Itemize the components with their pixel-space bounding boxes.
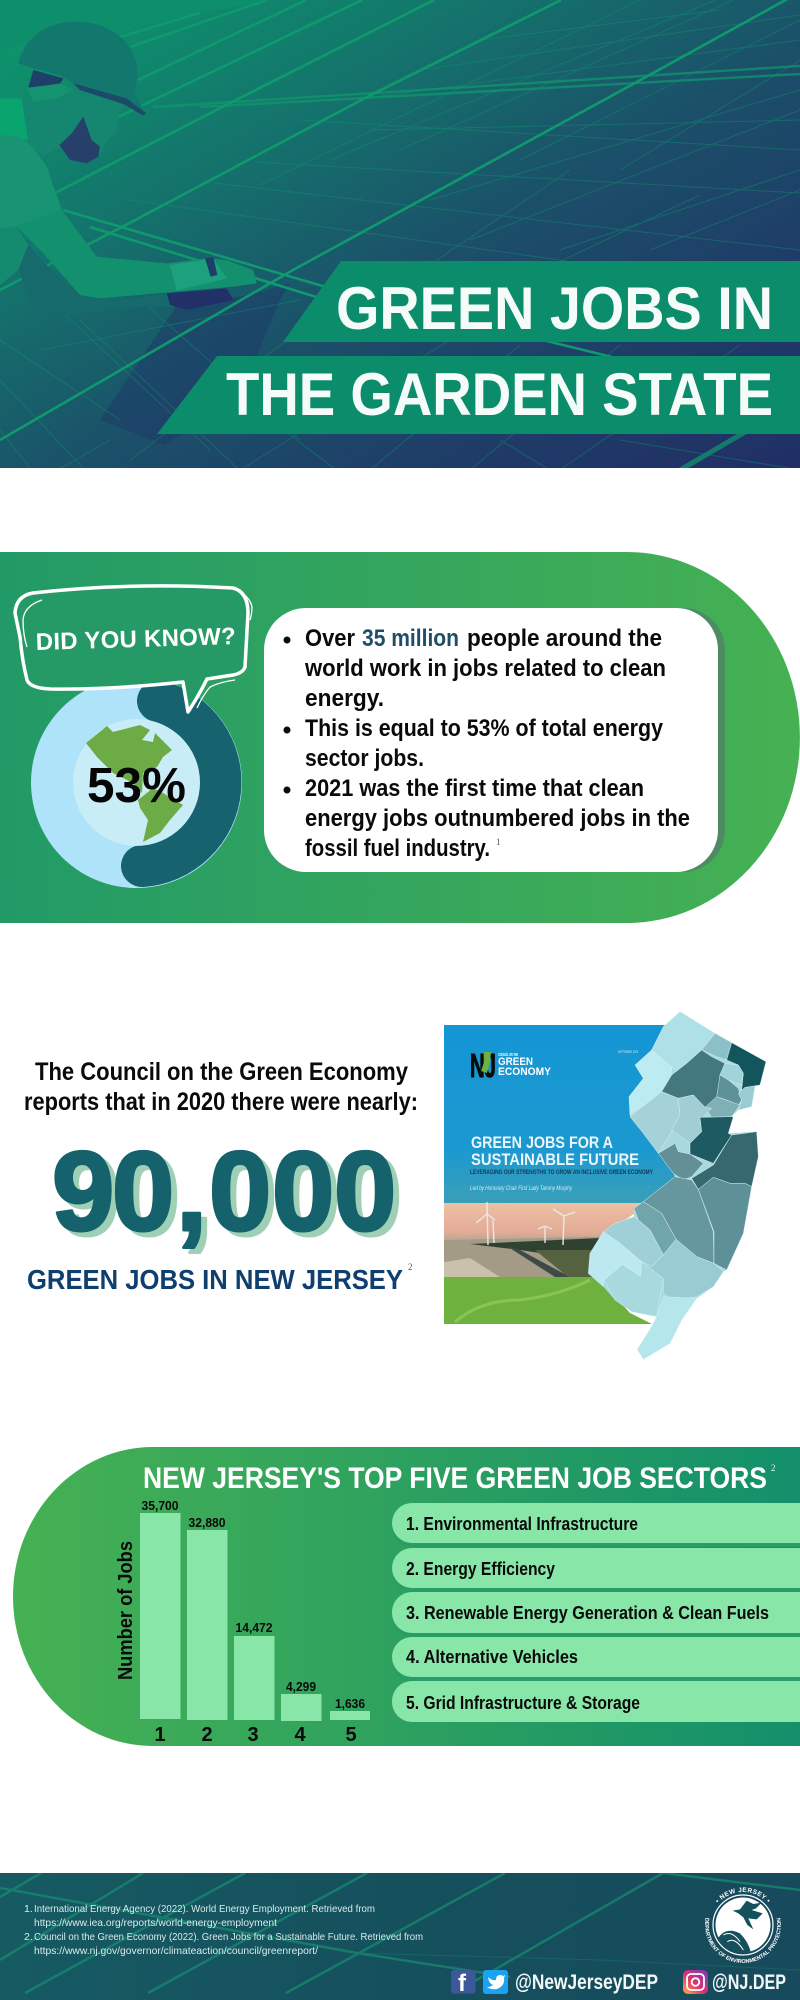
cover photo: wind turbines <box>444 1202 641 1277</box>
panel: did you know <box>0 552 800 923</box>
social: facebook and twitter <box>451 1970 658 1997</box>
map: new jersey counties <box>588 1012 766 1359</box>
report cover <box>444 1025 684 1324</box>
lower body <box>0 227 28 285</box>
panel heading: 2 <box>771 1463 776 1473</box>
sector list: 5. Grid Infrastructure & Storage <box>406 1693 640 1713</box>
cover logo <box>471 1052 551 1078</box>
hero: solar panel photo with worker <box>0 0 800 468</box>
logo: nj department of environmental protection seal: • NEW JERSEY • <box>716 1887 770 1902</box>
bright shoulder and neck <box>0 98 28 140</box>
cover green footer <box>444 1277 652 1324</box>
sector list: 2. Energy Efficiency <box>406 1559 555 1579</box>
head <box>22 98 118 154</box>
card: clean energy facts: world work in jobs related to clean <box>304 655 666 682</box>
report cover: LEVERAGING OUR STRENGTHS TO GROW AN INCLUSIVE GREEN ECONOMY <box>470 1170 653 1176</box>
shirt <box>0 135 62 228</box>
card: clean energy facts: fossil fuel industry. <box>305 835 490 862</box>
sector list <box>392 1503 800 1722</box>
intro text: council on the green economy: reports that in 2020 there were nearly: <box>24 1088 418 1116</box>
subheading: green jobs in new jersey: GREEN JOBS IN NEW JERSEY <box>27 1264 403 1295</box>
social: facebook and twitter: @NewJerseyDEP <box>515 1971 658 1994</box>
bar chart: jobs by sector: 14,472 <box>236 1620 272 1635</box>
logo: nj department of environmental protection seal: DEPARTMENT OF ENVIRONMENTAL PROTECTION <box>704 1918 781 1963</box>
card: clean energy facts <box>264 608 725 872</box>
axis title: Number of Jobs <box>115 1541 137 1680</box>
sector list: 1. Environmental Infrastructure <box>406 1514 638 1534</box>
worker figure <box>0 22 257 318</box>
big number: 90,000: 90,000 <box>52 1129 396 1254</box>
card: clean energy facts: Over <box>305 625 355 652</box>
hard hat <box>18 22 142 108</box>
speech bubble <box>15 586 252 712</box>
card: clean energy facts: 1 <box>496 837 500 847</box>
bar chart: jobs by sector: 2 <box>201 1724 213 1746</box>
bar chart: jobs by sector: 4,299 <box>286 1679 316 1694</box>
card: clean energy facts: energy jobs outnumbered jobs in the <box>305 805 690 832</box>
card: clean energy facts: 2021 was the first time that clean <box>305 775 644 802</box>
hair <box>28 70 63 87</box>
report cover: Led by Honorary Chair First Lady Tammy Murphy <box>470 1186 573 1192</box>
references: Council on the Green Economy (2022). Green Jobs for a Sustainable Future. Retrieved from <box>34 1931 423 1943</box>
sector list: 3. Renewable Energy Generation & Clean Fuels <box>406 1603 769 1623</box>
panel: top five green job sectors <box>13 1447 800 1746</box>
title banner: green jobs in: GREEN JOBS IN <box>336 275 773 342</box>
speech bubble: DID YOU KNOW? <box>35 623 236 656</box>
cover logo: GREEN <box>498 1056 533 1068</box>
social: facebook and twitter: f <box>458 1970 467 1997</box>
big number: 90,000: 90,000 <box>58 1134 402 1259</box>
bar chart: jobs by sector <box>115 1498 370 1746</box>
donut chart: 53 percent <box>31 677 242 888</box>
donut chart: 53 percent: 53% <box>87 759 186 813</box>
intro text: council on the green economy <box>24 1058 418 1116</box>
bar chart: jobs by sector: 35,700 <box>142 1498 178 1513</box>
sector list: 4. Alternative Vehicles <box>406 1647 578 1667</box>
card: clean energy facts: people around the <box>467 625 662 652</box>
headband <box>32 83 72 102</box>
card: clean energy facts: This is equal to 53% of total energy <box>305 715 664 742</box>
cover logo: ECONOMY <box>498 1066 552 1078</box>
references: 1. <box>24 1903 33 1915</box>
bar chart: jobs by sector: 32,880 <box>188 1515 226 1530</box>
footer <box>0 1873 800 2000</box>
cover logo: NJ <box>470 1047 496 1084</box>
report cover: SUSTAINABLE FUTURE <box>471 1150 639 1169</box>
report cover: GREEN JOBS FOR A <box>471 1133 613 1152</box>
card: clean energy facts: energy. <box>305 685 384 712</box>
bar chart: jobs by sector: 1,636 <box>335 1696 365 1711</box>
beard <box>59 117 100 163</box>
references: 2. <box>24 1931 33 1943</box>
bar chart: jobs by sector: 1 <box>154 1724 166 1746</box>
subheading: green jobs in new jersey: 2 <box>408 1262 412 1272</box>
solar panel grid lines <box>0 0 800 468</box>
references: International Energy Agency (2022). World Energy Employment. Retrieved from <box>34 1903 375 1915</box>
bar chart: jobs by sector: 3 <box>247 1724 259 1746</box>
tool pouch <box>167 288 233 310</box>
icon: earth globe <box>73 719 200 846</box>
bar chart: jobs by sector: 5 <box>345 1724 357 1746</box>
references <box>24 1903 423 1957</box>
arm <box>17 210 257 298</box>
card: clean energy facts: 35 million <box>362 625 459 652</box>
social: instagram <box>683 1970 786 1994</box>
card: clean energy facts: sector jobs. <box>305 745 424 772</box>
glove <box>170 258 227 291</box>
bar chart: jobs by sector: 4 <box>294 1724 306 1746</box>
intro text: council on the green economy: The Council on the Green Economy <box>35 1058 408 1086</box>
cover logo: COUNCIL ON THE <box>498 1052 518 1057</box>
logo: nj department of environmental protection seal <box>704 1887 781 1963</box>
report cover: SEPTEMBER 2022 <box>618 1050 638 1054</box>
forearm shadow <box>18 245 177 318</box>
references: https://www.iea.org/reports/world-energy-employment <box>34 1917 277 1929</box>
references: https://www.nj.gov/governor/climateaction/council/greenreport/ <box>34 1945 318 1957</box>
